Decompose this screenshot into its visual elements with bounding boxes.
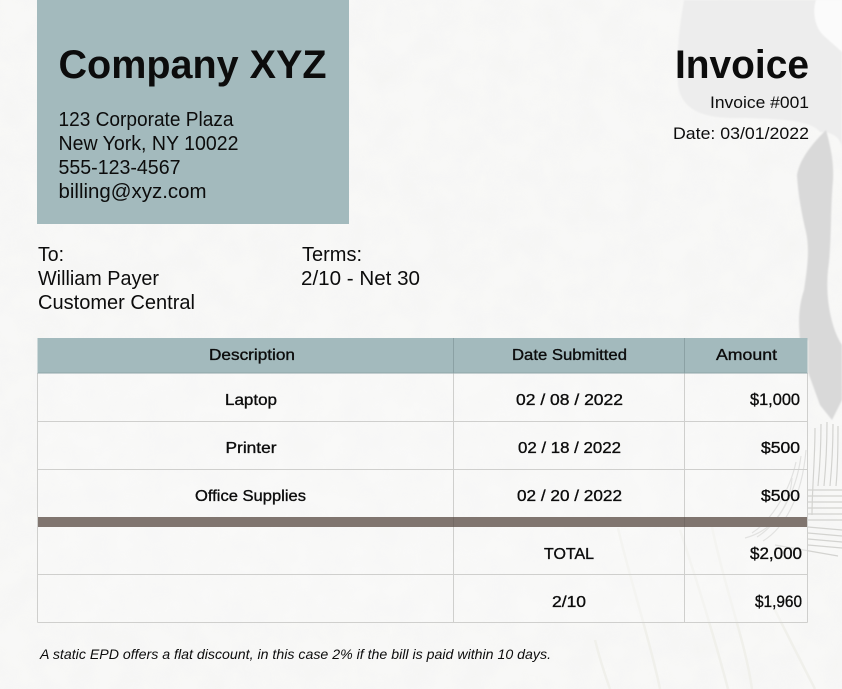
- total separator band: [38, 517, 808, 527]
- terms block: [301, 243, 420, 290]
- row: printer: [226, 440, 800, 457]
- header labels: Description: [209, 347, 295, 364]
- row: office supplies: $500: [761, 488, 800, 505]
- row: laptop: [225, 390, 800, 409]
- recipient block: To:: [38, 243, 64, 266]
- invoice heading: Invoice: [675, 43, 809, 87]
- row: total: TOTAL: [544, 546, 594, 563]
- invoice date: Date: 03/01/2022: [673, 124, 809, 143]
- row: total: $2,000: [750, 544, 802, 563]
- company address: 123 Corporate Plaza: [58, 108, 234, 131]
- row: printer: $500: [761, 440, 800, 457]
- row: laptop: Laptop: [225, 392, 277, 409]
- row: printer: 02 / 18 / 2022: [518, 440, 621, 457]
- invoice number: Invoice #001: [710, 93, 809, 112]
- background silhouette: figure: [677, 0, 842, 420]
- row: discounted total: $1,960: [755, 592, 802, 611]
- row: discounted total: 2/10: [552, 594, 586, 611]
- row: office supplies: 02 / 20 / 2022: [517, 488, 622, 505]
- row: total: [544, 544, 802, 563]
- background fingerprint lines: [745, 422, 842, 556]
- terms block: 2/10 - Net 30: [301, 267, 420, 290]
- company address: New York, NY 10022: [58, 132, 238, 155]
- recipient block: Customer Central: [38, 291, 195, 314]
- invoice table: [38, 338, 808, 623]
- row: office supplies: Office Supplies: [195, 488, 306, 505]
- header labels: [209, 347, 778, 364]
- table header: [38, 338, 808, 373]
- row: discounted total: [552, 592, 802, 611]
- terms block: Terms:: [302, 243, 362, 266]
- company name: Company XYZ: [58, 43, 326, 87]
- company panel: [37, 0, 349, 224]
- company address: billing@xyz.com: [58, 180, 206, 203]
- row: office supplies: [195, 488, 800, 505]
- row: printer: Printer: [226, 440, 277, 457]
- recipient block: William Payer: [38, 267, 159, 290]
- recipient block: [38, 243, 195, 314]
- background grass strokes: [595, 527, 815, 689]
- footnote: A static EPD offers a flat discount, in this case 2% if the bill is paid within 10 days.: [39, 646, 551, 662]
- company address: 555-123-4567: [58, 156, 180, 179]
- row: laptop: 02 / 08 / 2022: [516, 392, 623, 409]
- header labels: Amount: [716, 347, 778, 364]
- row: laptop: $1,000: [750, 390, 800, 409]
- invoice heading: [673, 43, 809, 143]
- company address: [58, 108, 238, 203]
- header labels: Date Submitted: [512, 347, 627, 364]
